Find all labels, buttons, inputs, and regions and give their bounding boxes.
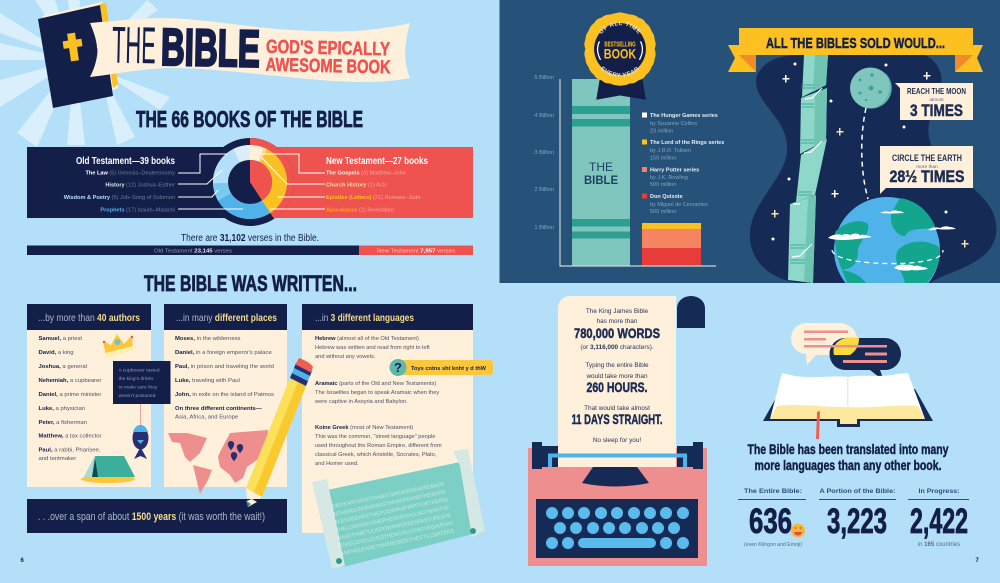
callout: vowel-free question: ? [394,360,402,375]
new testament labels: Epistles (Letters) (21) Romans–Jude [326,195,421,201]
page number 6: 6 [20,558,24,564]
legend: The Hunger Games series [650,113,718,119]
callout: weren't poisoned. [118,393,157,399]
scroll lettering [331,481,455,557]
heading: the bible was written: THE BIBLE WAS WRITTEN... [144,271,357,296]
title words: AWESOME BOOK [265,55,391,78]
scroll lettering: INTHEBEGINNINGWASTHEWORDANDTHEWORD [332,489,447,518]
legend: 500 million [650,182,676,188]
panel: places [164,304,287,494]
language descriptions: used throughout the Roman Empire, different from [315,443,442,449]
places list: Luke, traveling with Paul [175,378,240,384]
banner: span of years [27,499,287,533]
author list: David, a king [38,350,74,356]
scroll lettering: BLESSEDARETHEPOORINSPIRITFORTHEIRS [334,497,449,526]
language descriptions: were captive in Assyria and Babylon. [314,399,408,405]
night sky blob [750,55,996,283]
translation statement: more languages than any other book. [754,457,942,473]
title words: THE [111,17,157,75]
paper: Typing the entire Bible [585,362,649,369]
callout: reach the moon: almost [929,97,944,103]
earth [828,197,956,283]
icon: hanging fish with cupbearer callout [113,361,170,459]
callout: reach the moon: 3 TIMES [910,101,963,120]
language descriptions: This was the common, "street language" people [315,434,435,440]
badge: bestselling book: OF ALL TIME [599,21,642,34]
places list [175,336,274,420]
old testament labels: Prophets (17) Isaiah–Malachi [100,208,175,214]
places list: Asia, Africa, and Europe [175,414,239,420]
background rays [0,0,170,147]
callout: reach the moon: REACH THE MOON [907,86,966,96]
title words: BIBLE [160,19,261,79]
other books stacked bar [642,223,701,266]
panel: authors [27,304,151,487]
icon: tent [81,456,135,483]
scroll lettering: THELORDISMYSHEPHERDISHALLNOTWANTHE [335,505,451,534]
author list [38,336,102,462]
paper: 260 HOURS. [586,379,648,395]
stat: in progress [908,488,969,548]
language descriptions [314,336,442,467]
stat: portion of Bible [819,488,896,541]
author list: Matthew, a tax collector [38,434,102,440]
stat: in progress: 2,422 [910,502,968,541]
places list: Moses, in the wilderness [175,336,241,342]
places list: Daniel, in a foreign emperor's palace [175,350,272,356]
badge: bestselling book: BOOK [604,46,636,62]
legend: Don Quixote [650,194,683,200]
author list: Joshua, a general [38,364,87,370]
new testament labels [326,155,428,214]
paper: That would take almost [584,405,650,412]
keyboard [536,499,698,558]
paper: 11 DAYS STRAIGHT. [572,411,662,427]
panel: authors: ...by more than 40 authors [38,312,140,324]
scroll lettering: FORGODSOLOVEDTHEWORLDTHATHEGAVEHIS [338,521,454,550]
stat: entire Bible: 636 [749,502,792,541]
language descriptions: classical Greek, which Aristotle, Socrates, Plato, [315,452,437,458]
paper: has more than [597,318,638,325]
callout: the king's drinks [118,376,154,382]
legend: by J.K. Rowling [650,175,688,181]
icon: scroll [312,449,485,568]
paper tab [677,296,705,328]
stat: in progress: In Progress: [918,488,960,495]
callout: circle the earth: CIRCLE THE EARTH [892,153,962,163]
axis labels: 3 Billion [534,150,554,156]
language descriptions: and without any vowels. [315,354,376,360]
callout: reach the moon [895,83,973,120]
page number 7: 7 [976,558,980,564]
places list: John, in exile on the island of Patmos [175,392,274,398]
badge: bestselling book: EVERY YEAR [600,66,640,78]
author list: and tentmaker [38,456,76,462]
stat: entire Bible [738,488,806,548]
icon: open book with speech bubbles [763,323,933,439]
legend: by J.R.R. Tolkien [650,148,691,154]
language descriptions: Hebrew (almost all of the Old Testament) [315,336,419,342]
icon: holy book [38,2,118,108]
language descriptions: Koine Greek (most of New Testament) [315,425,413,431]
Bible bar: BIBLE [584,173,618,187]
legend: The Lord of the Rings series [650,140,724,146]
legend: 150 million [650,156,676,162]
stat: in progress: in 165 countries [918,542,960,548]
axis labels: 5 Billion [534,75,554,81]
callout: vowel-free question: Toys cntns sht knht y d thW [411,366,487,372]
title words [111,17,392,81]
author list: Paul, a rabbi, Pharisee, [38,448,101,454]
paper: would take more than [585,373,648,380]
moon [850,68,892,109]
author list: Daniel, a prime minister [38,392,101,398]
author list: Samuel, a priest [38,336,82,342]
connector lines [178,154,325,209]
paper: The King James Bible [586,308,649,315]
icon: crown [103,334,133,357]
callout: vowel-free question [390,359,493,376]
stat: entire Bible: The Entire Bible: [744,488,802,495]
banner: all the bibles sold [728,28,983,72]
language descriptions: Aramaic (parts of the Old and New Testaments) [315,381,436,387]
Bible bar [572,79,630,266]
paper: (or 3,116,000 characters). [580,344,654,351]
callout: circle the earth: 28½ TIMES [890,167,964,186]
old testament labels [64,155,175,214]
stat: portion of Bible: A Portion of the Bible: [820,488,896,495]
old testament labels: Wisdom & Poetry (5) Job–Song of Solomon [64,195,175,201]
old testament labels: Old Testament—39 books [76,155,175,167]
legend: by Miguel de Cervantes [650,202,708,208]
scroll lettering: ANDHELEADETHMEBESIDETHESTILLWATERS [340,528,455,557]
panel: space scene [750,55,996,303]
stars [771,62,968,248]
language descriptions: and Homer used. [315,461,359,467]
legend: Harry Potter series [650,168,699,174]
speech bubble: navy [830,338,901,381]
panel: languages: ...in 3 different languages [315,312,414,324]
verse bar [27,246,473,255]
paper: 780,000 WORDS [574,325,660,341]
badge: bestselling book [584,12,656,100]
new testament labels: Apocalypse (1) Revelation [326,208,394,214]
places list: Paul, in prison and traveling the world [175,364,274,370]
new testament labels: Church History (1) Acts [326,182,387,188]
panel: languages [302,304,473,533]
panel: best seller chart [500,0,1000,283]
callout: A cupbearer tasted [118,368,160,374]
axis labels: 2 Billion [534,187,554,193]
title words: GOD'S EPICALLY [266,37,390,60]
carriage [532,442,703,469]
typewriter illustration [528,296,707,566]
icon: emoji [791,524,805,538]
author list: Luke, a physician [38,406,85,412]
callout: circle the earth: more than [916,164,938,170]
language descriptions: Hebrew was written and read from right to left [315,345,430,351]
old testament labels: The Law (5) Genesis–Deuteronomy [85,170,175,176]
icon: pencil [246,358,313,507]
panel: places: ...in many different places [176,312,277,324]
banner: span of years: . . .over a span of about 1500 years (it was worth the wait!) [38,511,265,523]
bookmark [816,411,820,439]
scroll lettering: THEYEARTHEARTHANDITSHEAVENSWEREMADE [331,481,446,510]
author list: Nehemiah, a cupbearer [38,378,101,384]
world map [168,430,268,494]
verse count text: There are 31,102 verses in the Bible. [181,233,319,244]
verse bar: New Testament 7,957 verses [377,248,455,254]
donut chart [206,138,294,226]
paper [558,296,676,467]
paper: No sleep for you! [593,437,641,444]
stat: portion of Bible: 3,223 [827,502,887,541]
stat: entire Bible: (even Klingon and Emoji) [744,542,802,548]
scroll lettering: MAKETHMETOLIEDOWNINGREENPASTURESHE [337,513,452,542]
speech bubble: cream [791,323,857,365]
stack of Bibles [788,55,828,283]
axis labels [534,75,554,231]
axis labels: 1 Billion [534,225,554,231]
legend: 23 million [650,128,673,134]
panel: 66 books chart [27,138,473,226]
author list: Peter, a fisherman [38,420,87,426]
places list: On three different continents— [175,406,262,412]
callout: circle the earth [880,146,973,194]
Bible bar: THE [589,160,613,174]
callout [113,361,170,404]
title banner [90,17,410,82]
new testament labels: The Gospels (4) Matthew–John [326,170,406,176]
heading: 66 books: THE 66 BOOKS OF THE BIBLE [136,106,363,132]
axis labels: 4 Billion [534,113,554,119]
translation statement [748,441,949,473]
language descriptions: The Israelites began to speak Aramaic when they [315,390,439,396]
pages [770,373,925,424]
new testament labels: New Testament—27 books [326,155,428,167]
badge: bestselling book: BESTSELLING [604,41,636,48]
legend: by Suzanne Collins [650,121,697,127]
book cover [763,389,933,427]
old testament labels: History (12) Joshua–Esther [105,182,175,188]
verse bar: Old Testament 23,145 verses [154,248,232,254]
legend: 500 million [650,209,676,215]
orbit dashes [832,250,943,264]
dashed path from moon to earth [862,108,868,199]
legend [642,112,724,215]
callout: to make sure they [118,384,158,390]
